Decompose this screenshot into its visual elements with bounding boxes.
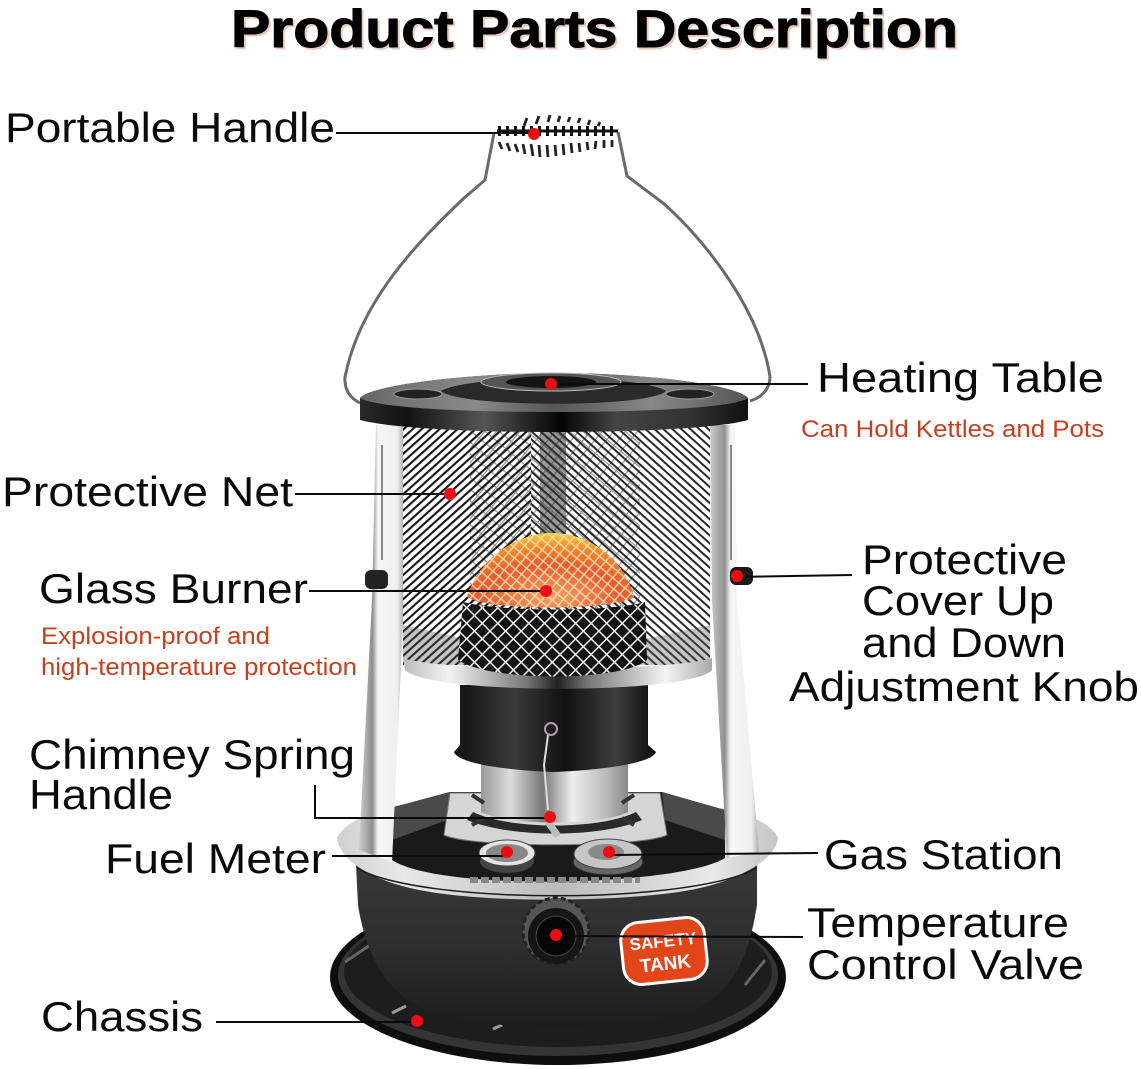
gas station cap: [573, 839, 643, 875]
burner base: [458, 602, 647, 676]
label: chimney spring handle: [29, 731, 355, 818]
safety tank badge: [619, 916, 709, 986]
heating table: [360, 373, 748, 432]
right leg: [710, 425, 759, 858]
note: explosion-proof: [41, 623, 357, 681]
chimney plate: [444, 793, 667, 845]
safety tank badge: SAFETY: [629, 929, 698, 955]
red marker dots: [411, 128, 743, 1027]
label: glass burner: Glass Burner: [39, 565, 308, 612]
tank: [337, 792, 778, 1027]
leader lines: [216, 133, 852, 1022]
label: temperature control valve: Control Valve: [807, 941, 1084, 988]
tray under net: [403, 658, 712, 689]
left leg: [359, 425, 404, 862]
label: adjustment knob: Cover Up: [862, 577, 1054, 624]
label: fuel meter: Fuel Meter: [105, 835, 326, 882]
label: portable handle: Portable Handle: [5, 104, 335, 151]
handle wire: [345, 115, 770, 403]
label: adjustment knob: [789, 536, 1139, 710]
chimney: [454, 685, 656, 836]
glass burner dome: [467, 533, 634, 608]
note: kettles and pots: Can Hold Kettles and Pots: [801, 416, 1104, 443]
label: temperature control valve: [807, 899, 1084, 988]
kerosene heater illustration: [330, 115, 786, 1065]
tray chassis: [330, 889, 786, 1065]
protective net: [403, 425, 710, 665]
fuel meter: [479, 840, 535, 873]
label: protective net: Protective Net: [2, 468, 293, 515]
title: Product Parts Description: [231, 0, 958, 59]
label: adjustment knob: Adjustment Knob: [789, 663, 1139, 710]
note: explosion-proof: high-temperature protection: [41, 654, 357, 681]
safety tank badge: TANK: [639, 951, 692, 978]
label: chimney spring handle: Chimney Spring: [29, 731, 355, 778]
label: gas station: Gas Station: [824, 831, 1063, 878]
note: explosion-proof: Explosion-proof and: [41, 623, 270, 650]
label: heating table: Heating Table: [817, 354, 1104, 401]
label: chassis: Chassis: [41, 993, 203, 1040]
label: temperature control valve: Temperature: [807, 899, 1069, 946]
label: adjustment knob: and Down: [862, 619, 1066, 666]
label: adjustment knob: Protective: [862, 536, 1067, 583]
label: chimney spring handle: Handle: [29, 771, 173, 818]
temperature knob: [523, 898, 589, 964]
adjustment knobs: [365, 570, 388, 589]
